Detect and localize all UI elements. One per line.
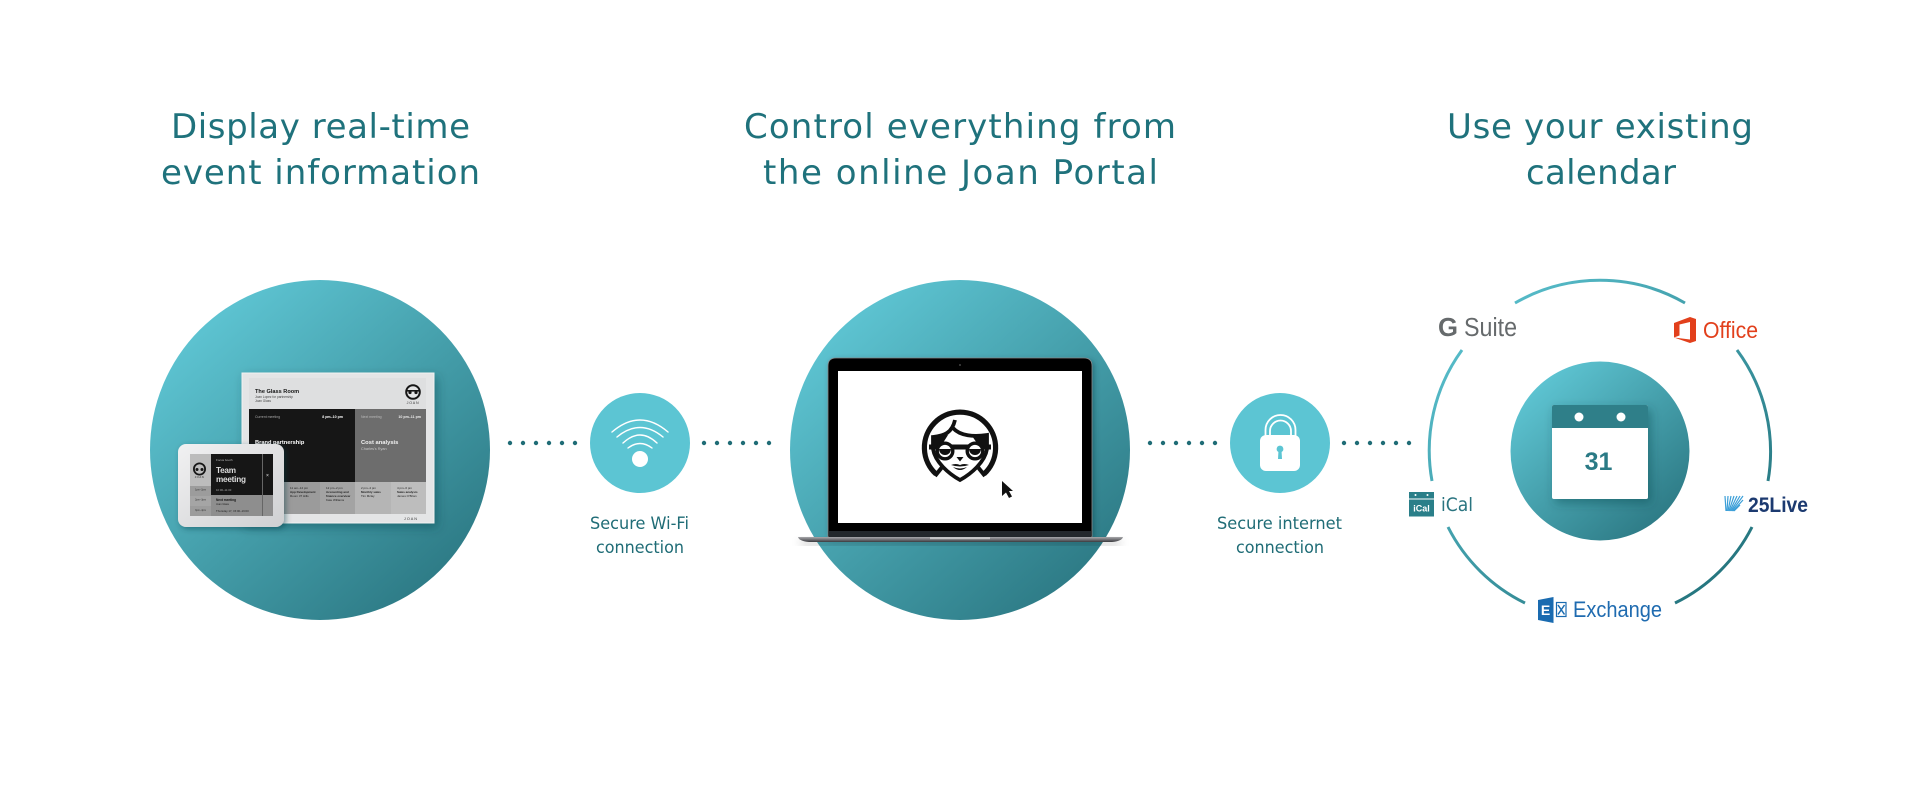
logo: iCal: iCal bbox=[1413, 504, 1430, 514]
large wall display: Kate Williams bbox=[326, 498, 345, 502]
large wall display: Tim Mclay bbox=[361, 494, 375, 498]
large wall display: Next meeting bbox=[361, 415, 382, 419]
small tablet device: JOAN bbox=[195, 475, 204, 479]
logo: Exchange bbox=[1538, 597, 1662, 623]
small tablet device: meeting bbox=[216, 475, 246, 484]
large wall display: Monthly sales bbox=[361, 490, 381, 494]
small tablet device: 3pm–4pm bbox=[195, 509, 206, 512]
small tablet device bbox=[178, 444, 284, 527]
large wall display: Charles's Ryan bbox=[361, 447, 387, 451]
large wall display: finance overview bbox=[326, 494, 351, 498]
large wall display: JOAN bbox=[407, 401, 419, 405]
title: Control everything from the online Joan Portal: Control everything from bbox=[744, 107, 1176, 147]
large wall display: Accounting and bbox=[326, 490, 349, 494]
large wall display: JOAN bbox=[404, 517, 418, 521]
large wall display: Brand partnership bbox=[255, 440, 305, 446]
large wall display: 10 pm–11 pm bbox=[398, 415, 421, 419]
small tablet device: × bbox=[266, 473, 269, 479]
title: Control everything from the online Joan Portal: the online Joan Portal bbox=[763, 153, 1158, 193]
logo: G Suite: Suite bbox=[1464, 314, 1517, 342]
icon: calendar page bbox=[1552, 405, 1648, 499]
logo: Office: Office bbox=[1703, 317, 1758, 343]
panel: laptop in circle bbox=[790, 280, 1130, 620]
logo: 25Live bbox=[1725, 494, 1808, 517]
small tablet device: Joan Glass bbox=[216, 502, 230, 506]
logo: G Suite bbox=[1438, 312, 1517, 342]
large wall display: Joan Glass bbox=[255, 399, 271, 403]
laptop bbox=[798, 358, 1123, 542]
logo: Exchange: Exchange bbox=[1573, 597, 1662, 622]
laptop base bbox=[798, 537, 1123, 542]
title: Display real-time event information: Display real-time bbox=[171, 107, 470, 147]
ring: calendar integrations arcs bbox=[1429, 280, 1771, 603]
small tablet device: Next meeting bbox=[216, 498, 236, 502]
large wall display: James O'Brian bbox=[397, 494, 417, 498]
label: Secure internet connection bbox=[1217, 514, 1343, 557]
large wall display bbox=[242, 373, 434, 523]
logo: G Suite: G bbox=[1438, 312, 1458, 342]
dotted connector: right of lock bbox=[1342, 441, 1411, 445]
label: Secure Wi-Fi connection: connection bbox=[596, 538, 684, 557]
title: Use your existing calendar: calendar bbox=[1526, 153, 1676, 193]
title: Display real-time event information: event information bbox=[161, 153, 480, 193]
large wall display: Sales analysis bbox=[397, 490, 418, 494]
small tablet device: 10:00–11:00 bbox=[216, 488, 232, 492]
large wall display: 2 pm–4 pm bbox=[361, 486, 377, 490]
small tablet device: Thursday 17, 15:00–16:00 bbox=[216, 509, 249, 513]
panel: central calendar circle bbox=[1510, 362, 1690, 540]
dotted connector: left of Wi-Fi bbox=[508, 441, 577, 445]
large wall display: Room 37 Hills bbox=[290, 494, 309, 498]
small tablet device: Team bbox=[216, 466, 236, 475]
title: Use your existing calendar bbox=[1447, 107, 1753, 193]
large wall display: 12 pm–2 pm bbox=[326, 486, 343, 490]
icon: mouse cursor bbox=[1002, 481, 1013, 498]
large wall display: Cost analysis bbox=[361, 440, 398, 446]
logo: Office bbox=[1674, 317, 1758, 343]
large wall display: Joan Lopez for partnership bbox=[255, 395, 293, 399]
large wall display: 11 am–12 pm bbox=[290, 486, 309, 490]
large wall display: 4 pm–6 pm bbox=[397, 486, 413, 490]
small tablet device: Focus booth bbox=[216, 458, 233, 462]
icon: lock circle bbox=[1230, 393, 1330, 493]
icon: Wi-Fi circle bbox=[590, 393, 690, 493]
teal circle behind devices bbox=[150, 280, 490, 620]
large wall display: App Development bbox=[290, 490, 316, 494]
logo: iCal: iCal bbox=[1441, 494, 1473, 516]
large wall display: Current meeting bbox=[255, 415, 280, 419]
dotted connector: left of lock bbox=[1148, 441, 1217, 445]
large wall display: The Glass Room bbox=[255, 389, 299, 395]
small tablet device: 2pm–3pm bbox=[195, 498, 206, 502]
title: Use your existing calendar: Use your existing bbox=[1447, 107, 1753, 147]
icon: calendar page: 31 bbox=[1585, 448, 1612, 476]
logo: Exchange: E bbox=[1541, 602, 1550, 618]
label: Secure Wi-Fi connection bbox=[590, 514, 689, 557]
dotted connector: right of Wi-Fi bbox=[702, 441, 771, 445]
title: Display real-time event information bbox=[161, 107, 480, 193]
title: Control everything from the online Joan Portal bbox=[744, 107, 1176, 193]
small tablet device: 1pm–2pm bbox=[195, 488, 206, 492]
teal circle behind laptop bbox=[790, 280, 1130, 620]
logo: iCal bbox=[1409, 492, 1473, 516]
icon: Joan face logo bbox=[924, 412, 996, 480]
label: Secure Wi-Fi connection: Secure Wi-Fi bbox=[590, 514, 689, 533]
large wall display: 8 pm–10 pm bbox=[322, 415, 343, 419]
logo: 25Live: 25Live bbox=[1748, 494, 1808, 517]
label: Secure internet connection: connection bbox=[1236, 538, 1324, 557]
panel: display devices in circle bbox=[150, 280, 490, 620]
label: Secure internet connection: Secure internet bbox=[1217, 514, 1343, 533]
